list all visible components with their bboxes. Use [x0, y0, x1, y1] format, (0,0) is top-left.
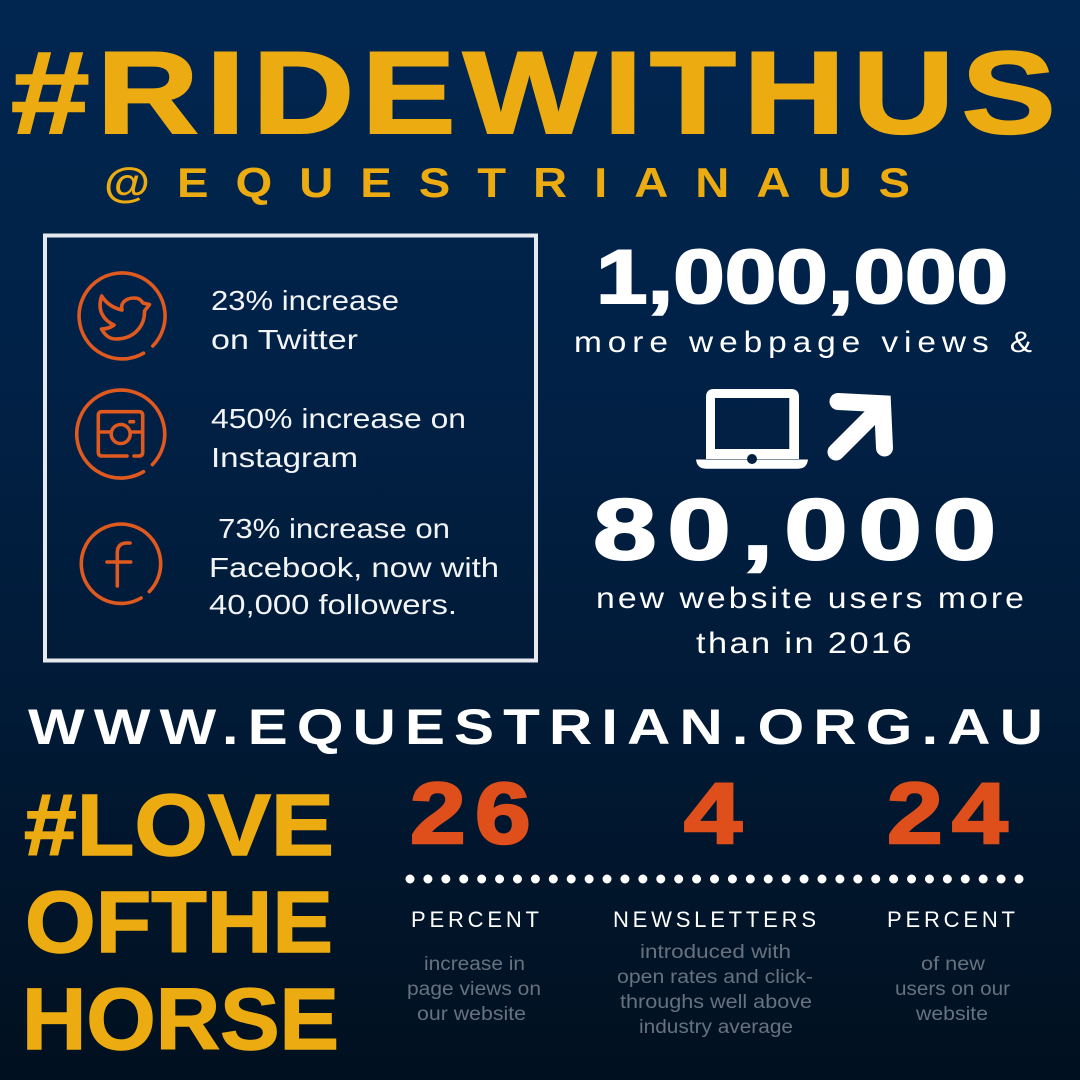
column: 4 newsletters: throughs well above [620, 992, 812, 1013]
icon: laptop [696, 389, 808, 469]
column: 24 percent: PERCENT [887, 907, 1015, 932]
panel: social media growth [45, 236, 536, 660]
subtitle: @EQUESTRIANAUS: @EQUESTRIANAUS [104, 159, 937, 206]
text: new website users: than in 2016 [696, 627, 914, 660]
text: instagram stat [211, 403, 466, 473]
text: twitter stat [211, 285, 399, 355]
stat: 80,000: 80,000 [593, 482, 1007, 578]
text: instagram stat: Instagram [211, 442, 358, 473]
column: 26 percent: PERCENT [411, 907, 539, 932]
column: 4 newsletters: 4 [684, 766, 742, 862]
panel border [45, 236, 536, 660]
title: #RIDEWITHUS: #RIDEWITHUS [11, 27, 1063, 158]
heading: website address: WWW.EQUESTRIAN.ORG.AU [28, 699, 1052, 755]
text: facebook stat: 40,000 followers. [209, 589, 457, 620]
text: twitter stat: on Twitter [211, 324, 358, 355]
column: 24 percent: users on our [895, 979, 1011, 1000]
text: facebook stat: Facebook, now with [209, 552, 499, 583]
heading: #LOVEOFTHEHORSE: #LOVE [24, 777, 334, 874]
icon: growth arrow [836, 402, 884, 452]
heading: #LOVEOFTHEHORSE: OFTHE [25, 874, 333, 971]
column: 24 percent [887, 766, 1017, 1025]
icon: facebook [81, 524, 161, 603]
dotted divider [410, 874, 1020, 884]
column: 4 newsletters: industry average [639, 1017, 793, 1038]
column: 24 percent: 24 [887, 766, 1017, 862]
icon: twitter [79, 273, 165, 359]
text: new website users: new website users more [596, 582, 1027, 615]
text: instagram stat: 450% increase on [211, 403, 466, 434]
text: new website users [596, 582, 1027, 660]
heading: #LOVEOFTHEHORSE [22, 777, 339, 1068]
column: 26 percent [407, 766, 541, 1025]
column: 4 newsletters [613, 766, 816, 1038]
column: 26 percent: page views on [407, 979, 541, 1000]
text: facebook stat: 73% increase on [218, 513, 450, 544]
heading: #LOVEOFTHEHORSE: HORSE [22, 971, 339, 1068]
column: 24 percent: of new [921, 954, 985, 975]
column: 4 newsletters: open rates and click- [617, 967, 813, 988]
text: facebook stat [209, 513, 499, 620]
stat: 1,000,000: 1,000,000 [596, 235, 1008, 320]
column: 26 percent: 26 [410, 766, 540, 862]
column: 4 newsletters: NEWSLETTERS [613, 907, 816, 932]
text: twitter stat: 23% increase [211, 285, 399, 316]
column: 26 percent: increase in [424, 954, 525, 975]
icon: instagram [77, 390, 165, 478]
column: 24 percent: website [915, 1004, 988, 1025]
text: more webpage views: more webpage views & [574, 326, 1038, 359]
column: 26 percent: our website [417, 1004, 526, 1025]
column: 4 newsletters: introduced with [640, 942, 791, 963]
